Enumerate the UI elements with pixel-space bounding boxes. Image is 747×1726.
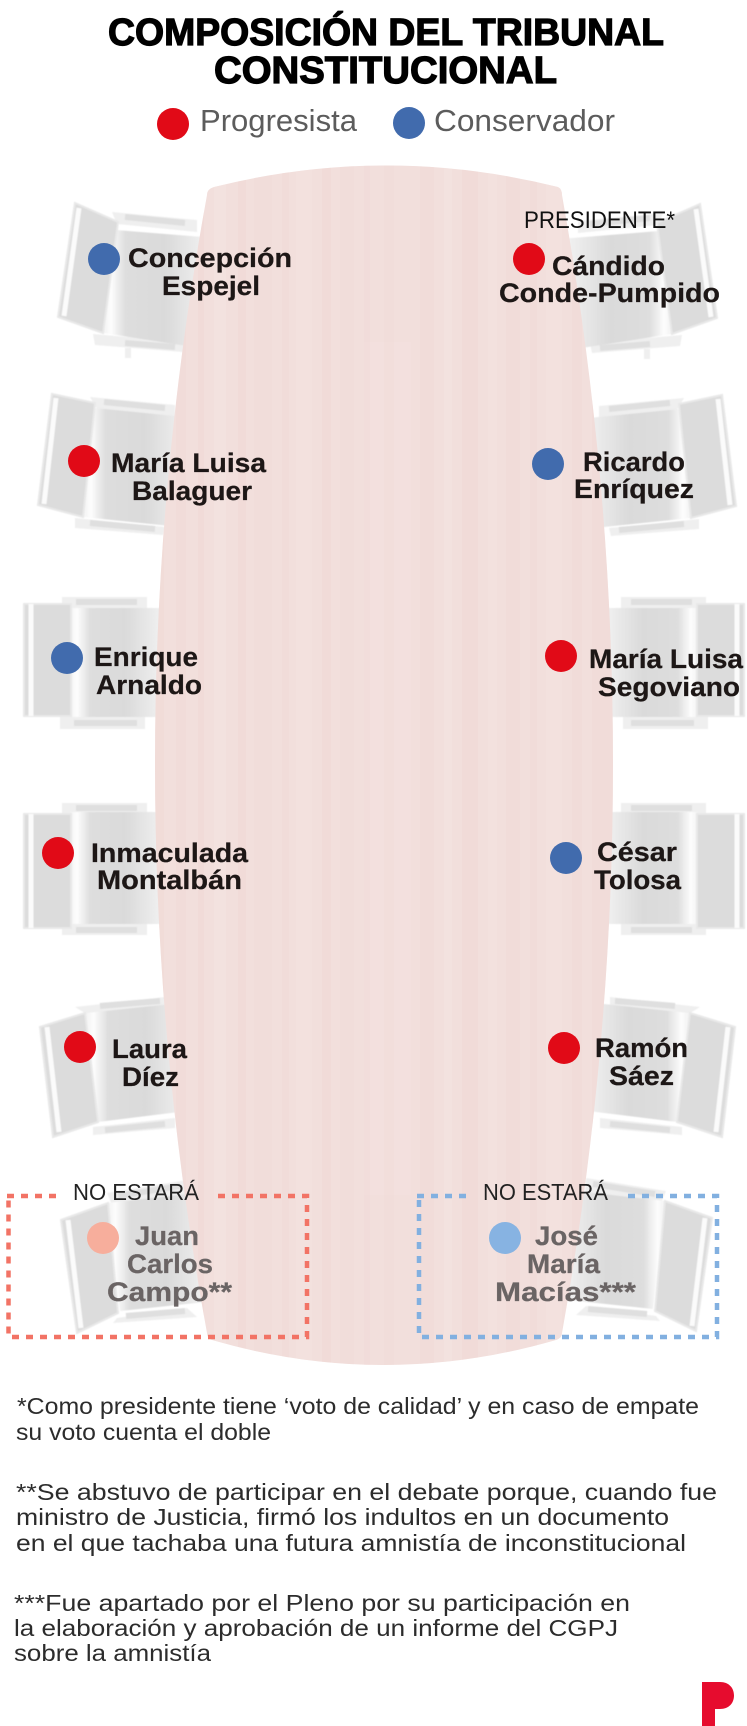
- seat: Enrique Arnaldo: Enrique: [94, 642, 198, 672]
- seat: Ramón Sáez: Sáez: [609, 1061, 674, 1091]
- absent box: José María Macías: María: [527, 1249, 601, 1279]
- seat: María Luisa Balaguer: [68, 445, 267, 506]
- title: CONSTITUCIONAL: [214, 50, 557, 92]
- seat: Cándido Conde-Pumpido, presidente: PRESIDENTE*: [524, 207, 675, 234]
- seat: Cándido Conde-Pumpido, presidente: Cándido: [552, 251, 665, 281]
- seat: Cándido Conde-Pumpido, presidente: [499, 207, 720, 308]
- seat: Concepción Espejel: [88, 243, 292, 301]
- seat: César Tolosa: Tolosa: [594, 865, 682, 895]
- seat: Inmaculada Montalbán: Inmaculada: [91, 838, 249, 868]
- seat: Ricardo Enríquez: Ricardo: [583, 447, 685, 477]
- seat: Laura Díez: Laura: [112, 1034, 188, 1064]
- footnote: Macías: sobre la amnistía: [14, 1640, 211, 1666]
- seat: Ricardo Enríquez: [532, 447, 694, 504]
- seat: María Luisa Balaguer: María Luisa: [111, 448, 267, 478]
- seat: Ramón Sáez: Ramón: [595, 1033, 688, 1063]
- seat: Laura Díez: [64, 1031, 188, 1092]
- footnote: Campo: [16, 1479, 717, 1556]
- footnote: Macías: ***Fue apartado por el Pleno por su participación en: [14, 1590, 630, 1616]
- absent box: Juan Carlos Campo: Juan: [135, 1221, 199, 1251]
- footnote: Campo: en el que tachaba una futura amnistía de inconstitucional: [16, 1530, 686, 1556]
- footnote: presidente: [16, 1393, 699, 1445]
- table: [155, 166, 613, 1365]
- absent box: José María Macías: José: [535, 1221, 598, 1251]
- seat: Inmaculada Montalbán: [42, 837, 249, 895]
- absent box: Juan Carlos Campo: [7, 1179, 307, 1337]
- seat: Inmaculada Montalbán: Montalbán: [97, 865, 242, 895]
- absent box: José María Macías: [417, 1179, 717, 1337]
- footnote: Campo: ministro de Justicia, firmó los indultos en un documento: [16, 1504, 669, 1530]
- footnote: presidente: *Como presidente tiene ‘voto de calidad’ y en caso de empate: [17, 1393, 699, 1419]
- logo: [702, 1682, 734, 1726]
- seat: María Luisa Segoviano: [545, 640, 744, 702]
- seat: César Tolosa: [550, 837, 682, 895]
- seat: Concepción Espejel: Espejel: [162, 271, 260, 301]
- seat: César Tolosa: César: [597, 837, 678, 867]
- absent box: Juan Carlos Campo: Campo**: [107, 1277, 233, 1307]
- legend: Progresista: [200, 103, 358, 138]
- seat: Cándido Conde-Pumpido, presidente: Conde-Pumpido: [499, 278, 720, 308]
- absent box: Juan Carlos Campo: Carlos: [127, 1249, 213, 1279]
- absent box: Juan Carlos Campo: NO ESTARÁ: [73, 1179, 200, 1205]
- footnote: Campo: **Se abstuvo de participar en el debate porque, cuando fue: [16, 1479, 717, 1505]
- seat: Ramón Sáez: [548, 1032, 688, 1091]
- title: [108, 10, 664, 92]
- seat: Enrique Arnaldo: Arnaldo: [96, 670, 202, 700]
- seat: Enrique Arnaldo: [51, 642, 202, 700]
- seat: María Luisa Segoviano: María Luisa: [589, 644, 744, 674]
- footnote: Macías: la elaboración y aprobación de un informe del CGPJ: [14, 1615, 618, 1641]
- seat: María Luisa Segoviano: Segoviano: [598, 672, 740, 702]
- absent box: José María Macías: Macías***: [495, 1277, 637, 1307]
- legend: Conservador: [434, 103, 615, 138]
- seat: Ricardo Enríquez: Enríquez: [574, 474, 694, 504]
- seat: Laura Díez: Díez: [122, 1062, 179, 1092]
- title: COMPOSICIÓN DEL TRIBUNAL: [108, 10, 664, 54]
- chairs around the table: [24, 203, 744, 1333]
- seat: Concepción Espejel: Concepción: [128, 243, 292, 273]
- seat: María Luisa Balaguer: Balaguer: [132, 476, 253, 506]
- legend: [157, 103, 615, 140]
- absent box: José María Macías: NO ESTARÁ: [483, 1179, 609, 1205]
- footnote: presidente: su voto cuenta el doble: [16, 1419, 271, 1445]
- footnote: Macías: [14, 1590, 630, 1666]
